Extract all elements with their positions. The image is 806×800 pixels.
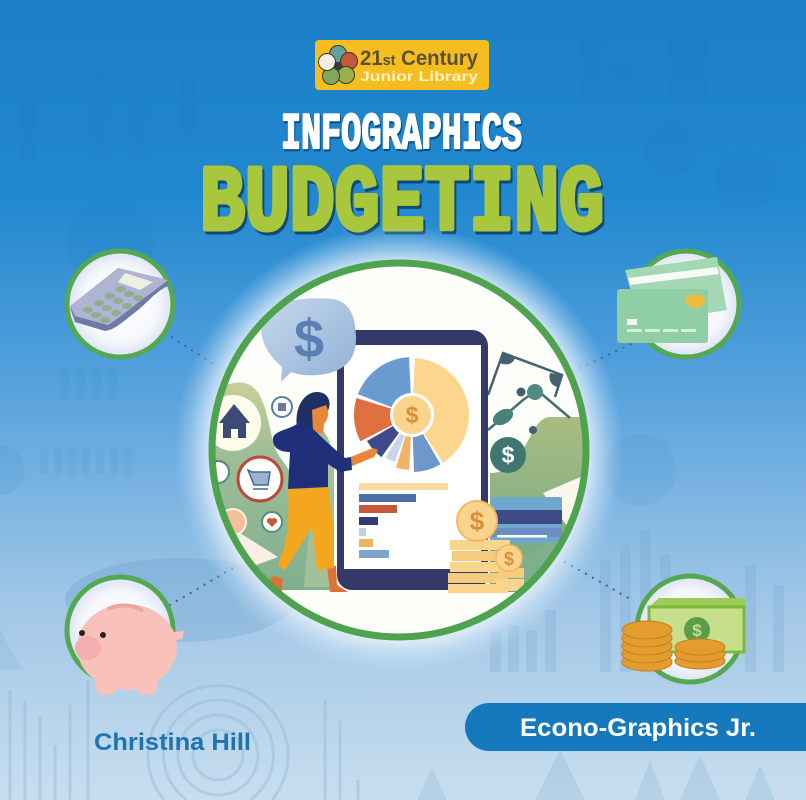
dotted connector lines	[165, 333, 640, 605]
bar list on tablet	[359, 483, 448, 558]
title: Infographics	[281, 107, 523, 166]
icon: banknotes	[488, 353, 570, 473]
badge: credit cards	[617, 251, 739, 357]
coin stacks: $	[470, 506, 485, 536]
publisher logo	[315, 40, 489, 90]
series label pill	[465, 703, 806, 751]
faint triangles bottom	[417, 750, 775, 800]
title: Infographics: INFOGRAPHICS	[281, 107, 522, 164]
publisher logo: Junior Library	[360, 68, 478, 84]
hill behind person	[304, 427, 334, 587]
person	[270, 392, 378, 592]
badge: calculator	[67, 251, 173, 357]
icon: heart badge	[262, 512, 282, 532]
icon: heart bubble	[226, 508, 247, 536]
icon: paper plane	[237, 534, 278, 565]
right hills	[490, 417, 585, 592]
house halo	[216, 395, 261, 451]
badge: cash and coins: $	[692, 621, 702, 640]
icon: house	[219, 404, 250, 438]
left hills	[216, 382, 330, 590]
coin stacks	[448, 501, 524, 593]
icon: banknotes: $	[502, 442, 515, 468]
stack of cards	[491, 497, 568, 582]
faint lens shape	[65, 558, 295, 642]
icon: shopping cart	[238, 457, 282, 501]
publisher logo: 21st Century	[360, 47, 478, 70]
faint bars and rings lower left	[10, 680, 358, 800]
white glow behind main circle	[174, 225, 624, 675]
icon: flower	[318, 46, 358, 84]
badge: cash and coins	[622, 576, 745, 682]
series label pill: Econo-Graphics Jr.	[520, 714, 756, 742]
pie chart: $	[406, 402, 419, 428]
pie chart	[354, 357, 469, 472]
main illustration circle	[202, 263, 586, 637]
speech bubble with dollar: $	[294, 309, 324, 369]
author name: Christina Hill	[94, 729, 251, 756]
icon: partial circle	[216, 460, 230, 484]
faint background pattern	[0, 30, 775, 670]
white paper	[543, 477, 580, 525]
title: Budgeting: BUDGETING	[200, 152, 604, 257]
title: Infographics: INFOGRAPHICS	[282, 109, 523, 166]
coin stacks: $	[504, 549, 514, 569]
tablet	[337, 330, 488, 590]
icon: small badge	[272, 397, 292, 417]
badge: piggy bank	[67, 577, 184, 695]
speech bubble with dollar	[261, 298, 356, 382]
title: Budgeting: BUDGETING	[202, 155, 606, 260]
faint bars right	[490, 530, 784, 672]
